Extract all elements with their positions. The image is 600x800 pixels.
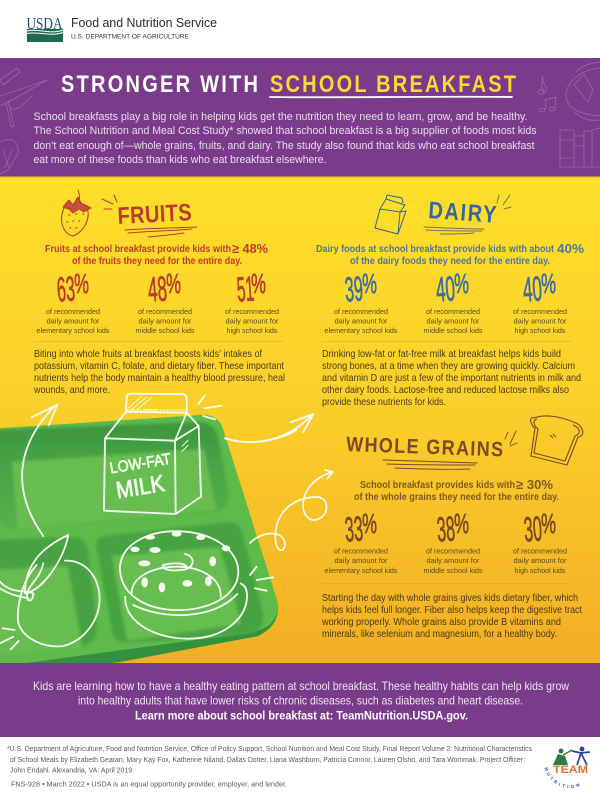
- stat: 33% elementary: 33: [344, 509, 364, 550]
- icon: low-fat milk carton: [104, 394, 201, 514]
- logo: Team Nutrition: TEAM: [553, 764, 588, 776]
- label: middle: [424, 546, 483, 575]
- panel: purple intro banner: [0, 58, 600, 178]
- lower-right compartment: [96, 522, 263, 643]
- stat: 48% middle: 48: [147, 269, 168, 310]
- top compartment: [0, 422, 229, 530]
- fruits body text: Biting into whole fruits at breakfast boosts kids’ intakes of: [34, 349, 262, 360]
- label: high: high school kids: [226, 326, 278, 335]
- label: elementary: of recommended: [334, 546, 388, 556]
- dairy body text: strong bones, at a time when they are growing quickly. Calcium: [322, 361, 575, 372]
- label: elementary: elementary school kids: [324, 566, 398, 575]
- fruits body text: nutrients help the body maintain a healthy blood pressure, heal: [34, 373, 285, 384]
- title: [61, 70, 517, 97]
- summary sentence: [316, 241, 584, 267]
- label: low-fat: LOW-FAT: [109, 451, 173, 477]
- logo: Team Nutrition: [544, 746, 590, 788]
- whole grains body text: working properly. Whole grains also provide B vitamins and: [321, 617, 561, 628]
- dairy body text: other dairy foods. Lactose-free and reduced lactose milks also: [322, 385, 569, 396]
- label: elementary: elementary school kids: [36, 326, 110, 335]
- intro paragraph: School breakfasts play a big role in helping kids get the nutrition they need to learn, grow, and be healthy.: [34, 111, 528, 123]
- summary sentence: School breakfast provides kids with: [360, 480, 515, 491]
- intro paragraph: eat more of these foods than kids who eat breakfast elsewhere.: [34, 154, 326, 166]
- label: elementary: [324, 546, 398, 575]
- label: elementary: daily amount for: [334, 316, 388, 326]
- footnote citation: *U.S. Department of Agriculture, Food and Nutrition Service, Office of Policy Support, School Nutrition and Meal Cost Study, Final Report Volume 2: Nutritional Characteristics: [7, 746, 532, 753]
- fruits body text: wounds, and more.: [33, 385, 110, 396]
- heading: whole grains: [346, 431, 517, 469]
- fruits body text: potassium, vitamin C, folate, and dietary fiber. These important: [34, 361, 284, 372]
- icon: apple: [0, 535, 100, 649]
- department name: U.S. DEPARTMENT OF AGRICULTURE: [71, 34, 189, 40]
- illustration: green lunch tray: [0, 415, 278, 676]
- label: middle: middle school kids: [424, 566, 483, 575]
- label: middle: daily amount for: [138, 316, 192, 326]
- whole grains body text: [321, 593, 582, 640]
- stat: 38% middle: 38: [436, 509, 456, 550]
- yellow gradient background: [0, 177, 600, 664]
- summary sentence: of the dairy foods they need for the entire day.: [350, 256, 550, 267]
- icon: globe: [566, 62, 600, 120]
- label: elementary: daily amount for: [334, 556, 388, 565]
- summary sentence: of the whole grains they need for the entire day.: [354, 492, 559, 503]
- summary sentence: Fruits at school breakfast provide kids with: [45, 244, 231, 255]
- label: high: daily amount for: [226, 316, 279, 326]
- label: milk: MILK: [114, 470, 167, 503]
- label: middle: of recommended: [426, 307, 480, 316]
- panel: dairy: [316, 195, 584, 408]
- icon: music notes: [538, 76, 556, 112]
- label: elementary: of recommended: [46, 307, 100, 316]
- stat: 51% high: 51: [236, 269, 255, 310]
- label: high: of recommended: [225, 307, 279, 316]
- footnote citation: of School Meals by Elizabeth Gearan, Mary Kay Fox, Katherine Niland, Dallas Dotter, Liana Washburn, Patricia Connor, Lauren Olsho, and Tara Wommak. Project Officer:: [10, 757, 525, 764]
- publication line: FNS-928 • March 2022 • USDA is an equal opportunity provider, employer, and lender.: [11, 782, 287, 788]
- agency name: Food and Nutrition Service: [71, 15, 217, 30]
- header: USDA logo and agency name: [26, 14, 217, 42]
- label: high: daily amount for: [514, 556, 567, 565]
- stat: 63% elementary: 63: [56, 269, 76, 310]
- whole grains body text: minerals, like selenium and magnesium, for a healthy body.: [322, 629, 557, 640]
- summary sentence: of the fruits they need for the entire day.: [72, 256, 242, 267]
- logo: Team Nutrition: NUTRITION: [544, 767, 580, 788]
- label: middle: of recommended: [138, 307, 192, 316]
- heading: fruits: FRUITS: [117, 198, 192, 229]
- stat: 38% middle: %: [454, 508, 469, 539]
- panel: purple closing banner: [0, 663, 600, 737]
- intro paragraph: don’t eat enough of—whole grains, fruits, and dairy. The study also found that kids who eat school breakfast: [34, 140, 535, 152]
- label: middle: middle school kids: [424, 326, 483, 335]
- stat: 51% high: %: [251, 268, 266, 299]
- arrow: right from tray to dairy: [225, 414, 313, 442]
- illustration: chalk drawings on tray: [0, 394, 313, 649]
- lower-left compartment: [0, 537, 97, 656]
- icon: milk carton: [375, 195, 406, 234]
- icon: USDA logo: USDA: [26, 14, 63, 33]
- label: middle: daily amount for: [426, 556, 480, 565]
- summary sentence: Dairy foods at school breakfast provide kids with about: [316, 244, 555, 255]
- icon: light bulb: [0, 139, 18, 174]
- label: elementary: [324, 307, 398, 335]
- arrow: up-left from fruit: [22, 405, 57, 536]
- panel: fruits: [33, 190, 285, 396]
- footnote citation: [7, 746, 532, 774]
- icon: graduation cap: [0, 80, 47, 127]
- stat: 40% high: %: [541, 268, 556, 299]
- stat: 40% high: 40: [522, 269, 543, 310]
- arrow: curly to whole grains: [250, 470, 333, 550]
- icon: bread slice: [531, 416, 583, 465]
- icon: books: [560, 128, 600, 167]
- dairy body text: provide these nutrients for kids.: [322, 397, 446, 408]
- summary sentence: [354, 477, 559, 503]
- label: high: high school kids: [514, 326, 566, 335]
- icon: strawberry: [62, 190, 91, 236]
- stat: 39% elementary: 39: [344, 269, 364, 310]
- dairy body text: [322, 349, 581, 408]
- label: elementary: [36, 307, 110, 335]
- label: high: [513, 546, 567, 575]
- summary sentence: [45, 241, 268, 267]
- heading: whole grains: WHOLE GRAINS: [346, 433, 504, 462]
- icon: pencil: [0, 68, 20, 85]
- title: STRONGER WITH: [61, 70, 258, 97]
- intro paragraph: The School Nutrition and Meal Cost Study* showed that school breakfast is a big supplier of foods most kids: [34, 125, 537, 137]
- summary sentence: ≥ 48%: [232, 241, 268, 256]
- label: elementary: of recommended: [334, 307, 388, 316]
- label: middle: [424, 307, 483, 335]
- label: middle: [136, 307, 195, 335]
- label: middle: daily amount for: [426, 316, 480, 326]
- stat: 30% high: %: [541, 508, 556, 539]
- icon: USDA logo: [26, 14, 63, 42]
- label: elementary: daily amount for: [46, 316, 100, 326]
- icon: bagel with sprinkles: [120, 531, 247, 639]
- label: elementary: elementary school kids: [324, 326, 398, 335]
- fruits body text: [33, 349, 285, 396]
- heading: fruits: [102, 195, 197, 237]
- stat: 39% elementary: %: [362, 268, 377, 299]
- stat: 63% elementary: %: [74, 268, 89, 299]
- summary sentence: 40%: [557, 241, 584, 256]
- dairy body text: Drinking low-fat or fat-free milk at breakfast helps kids build: [322, 349, 561, 360]
- white header background: [0, 0, 600, 58]
- panel: whole grains: [321, 416, 583, 640]
- stat: 40% middle: %: [454, 268, 469, 299]
- summary sentence: ≥ 30%: [516, 477, 553, 492]
- label: high: [225, 307, 279, 335]
- label: high: of recommended: [513, 307, 567, 316]
- label: middle: middle school kids: [136, 326, 195, 335]
- intro paragraph: [34, 111, 537, 166]
- label: middle: of recommended: [426, 546, 480, 556]
- label: high: daily amount for: [514, 316, 567, 326]
- heading: dairy: [424, 195, 511, 234]
- label: high: [513, 307, 567, 335]
- label: high: of recommended: [513, 546, 567, 556]
- heading: dairy: DAIRY: [428, 196, 498, 228]
- closing message: into healthy adults that have lower risks of chronic diseases, such as diabetes and heart disease.: [78, 694, 523, 708]
- stat: 40% middle: 40: [435, 269, 456, 310]
- title: SCHOOL BREAKFAST: [270, 70, 517, 97]
- label: high: high school kids: [514, 566, 566, 575]
- footnote citation: John Endahl. Alexandria, VA: April 2019.: [10, 768, 134, 774]
- closing message: [33, 679, 569, 708]
- accent ticks: [198, 395, 273, 591]
- call to action link: Learn more about school breakfast at: TeamNutrition.USDA.gov.: [135, 708, 468, 722]
- stat: 48% middle: %: [166, 268, 181, 299]
- stat: 33% elementary: %: [362, 508, 377, 539]
- stat: 30% high: 30: [523, 509, 543, 550]
